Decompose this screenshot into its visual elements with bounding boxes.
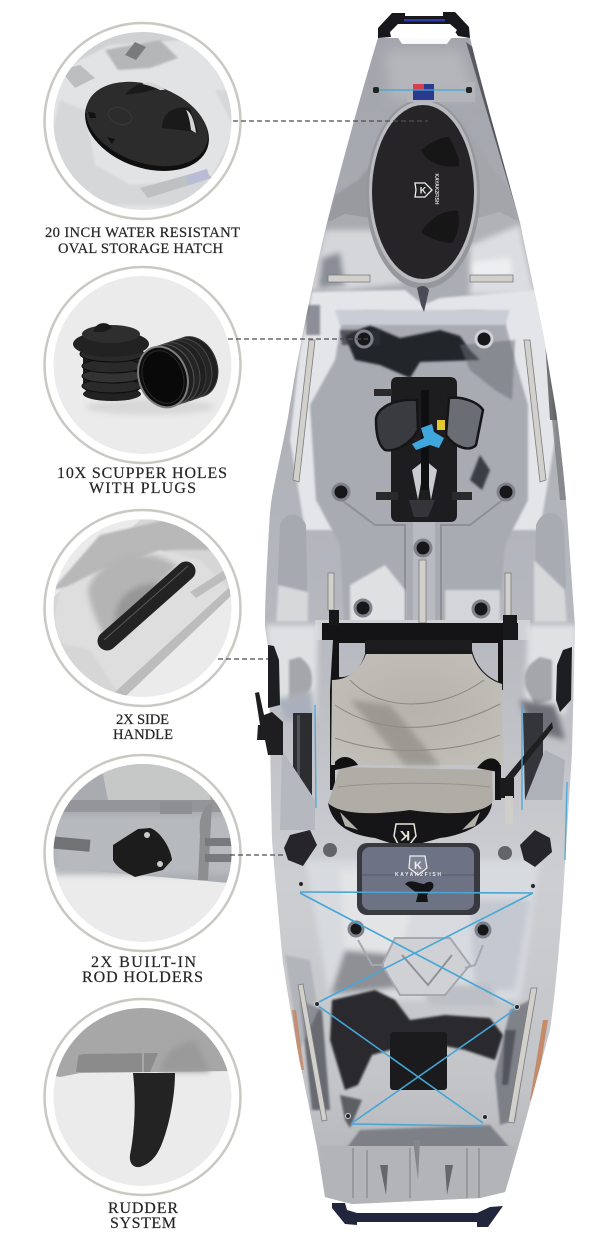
caption: scupper holes: WITH PLUGS <box>89 480 196 497</box>
circle: oval storage hatch <box>44 23 240 219</box>
rear hatch logo <box>395 856 441 878</box>
pedal left <box>376 400 418 450</box>
caption: hatch: 20 INCH WATER RESISTANT <box>45 225 240 241</box>
deck rails <box>293 275 546 1123</box>
back support <box>365 640 472 660</box>
seat logo <box>394 824 416 844</box>
side handles and lever <box>255 645 572 755</box>
bow shading <box>466 42 521 226</box>
caption: scupper holes: 10X SCUPPER HOLES <box>57 465 227 482</box>
scupper holes <box>333 331 514 937</box>
leader line: handle <box>218 658 268 660</box>
aft dark patches <box>285 955 530 1150</box>
bungee cords <box>298 882 536 1126</box>
seat <box>322 610 553 848</box>
bow bungee and flag <box>373 82 475 102</box>
caption: rod holders: 2X BUILT-IN <box>91 954 196 971</box>
footwell floor <box>310 311 528 640</box>
seat front <box>328 803 492 848</box>
aft white mottling <box>305 860 540 1005</box>
footwell white rim <box>290 290 555 530</box>
bow wing moulding <box>325 168 522 232</box>
caption: rod holders <box>82 954 203 986</box>
footwell lines and light patch <box>315 495 530 640</box>
backrest fabric <box>331 654 503 765</box>
hexagon emblem <box>358 938 483 995</box>
pedal right <box>446 398 483 448</box>
blue mechanism <box>412 424 444 450</box>
caption: side handle <box>113 712 173 743</box>
rear hatch logo: KAYAK2FISH <box>395 872 441 878</box>
pedal console <box>374 377 483 522</box>
circle: rod holders <box>44 755 240 951</box>
seat logo: K <box>400 828 410 844</box>
caption: scupper holes <box>57 465 227 497</box>
leader line: hatch <box>233 120 428 122</box>
strap <box>505 722 553 785</box>
cushion <box>328 767 493 818</box>
caption: side handle: HANDLE <box>113 727 173 743</box>
caption: hatch <box>45 225 240 257</box>
leader line: scupper <box>228 338 368 340</box>
hatch logo: KAYAK2FISH <box>433 173 439 205</box>
stern carry handle <box>332 1203 503 1227</box>
seat channels <box>280 713 565 830</box>
circle: side handle <box>44 510 240 706</box>
hatch handles <box>421 137 459 243</box>
caption: rudder system: RUDDER <box>108 1200 178 1217</box>
caption: rod holders: ROD HOLDERS <box>82 969 203 986</box>
hatch logo <box>415 173 439 205</box>
drain below hatch <box>417 286 429 312</box>
rear deck plate <box>390 1032 447 1090</box>
kayak: top view <box>255 12 578 1227</box>
stern moulding <box>324 1146 510 1204</box>
rod holders <box>284 830 552 867</box>
caption: side handle: 2X SIDE <box>116 712 169 728</box>
rear hatch <box>357 843 480 915</box>
side blue cords <box>315 705 567 860</box>
mottled white patch fore <box>308 225 535 295</box>
storage hatch <box>366 99 480 289</box>
deck details clipped to hull <box>265 42 578 1205</box>
leader line: rod holder <box>230 854 286 856</box>
caption: rudder system <box>108 1200 178 1232</box>
hatch logo: K <box>420 186 427 196</box>
caption: rudder system: SYSTEM <box>110 1215 176 1232</box>
hull <box>265 38 575 1204</box>
side graphics <box>292 340 568 1100</box>
dark mottling fore cockpit <box>306 305 515 490</box>
bow carry handle <box>378 12 470 44</box>
side panels <box>276 513 567 622</box>
rear hatch logo: K <box>414 860 422 872</box>
circle: rudder system <box>44 999 240 1195</box>
circle: scupper plugs <box>44 267 240 463</box>
caption: hatch: OVAL STORAGE HATCH <box>58 241 223 257</box>
seat frame <box>322 623 518 800</box>
side notches <box>265 625 578 740</box>
